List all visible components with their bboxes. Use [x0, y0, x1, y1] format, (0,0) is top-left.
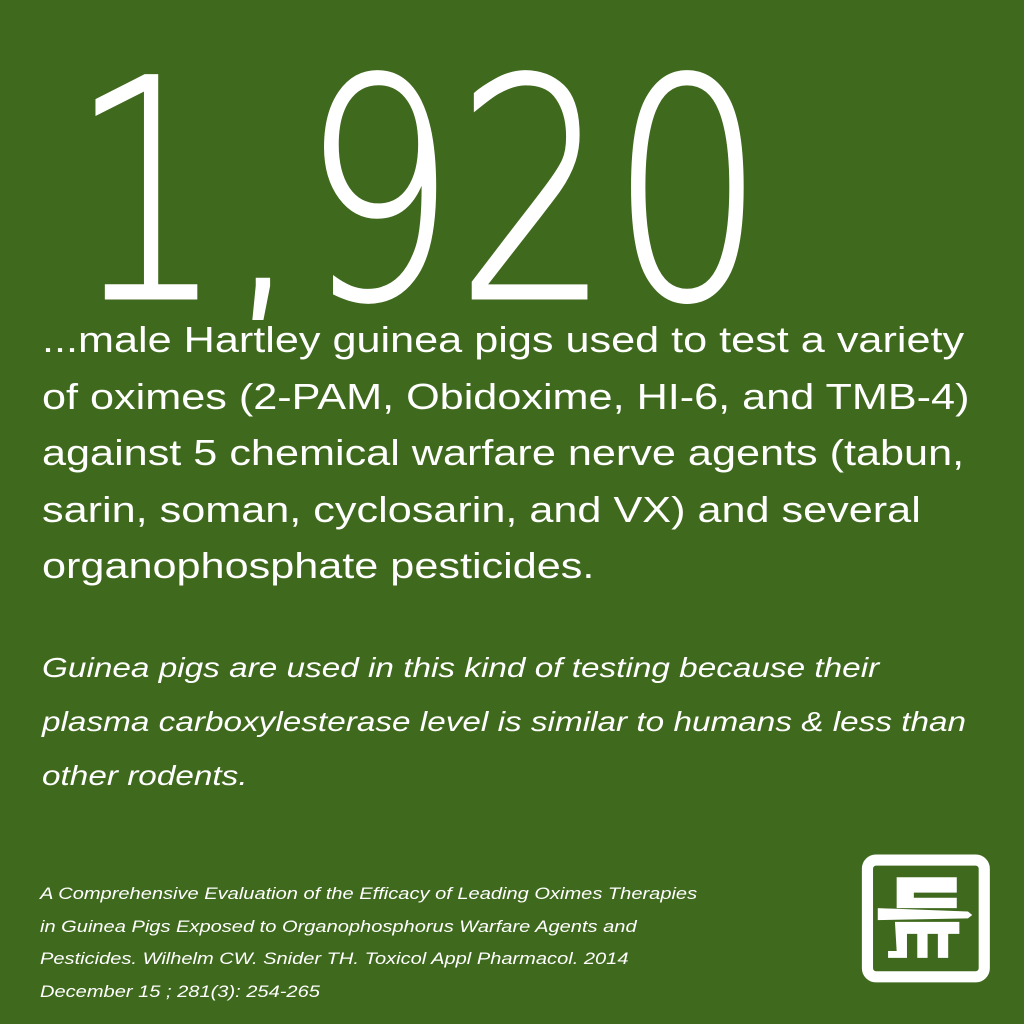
italic note: other rodents. [42, 760, 248, 791]
main text block: ...male Hartley guinea pigs used to test a variety [42, 319, 964, 360]
icon: logo [862, 854, 990, 982]
main text block: against 5 chemical warfare nerve agents (tabun, [42, 432, 964, 473]
citation: A Comprehensive Evaluation of the Efficacy of Leading Oximes Therapies [40, 884, 697, 903]
main text block: organophosphate pesticides. [42, 545, 594, 586]
citation: December 15 ; 281(3): 254-265 [40, 982, 320, 1000]
italic note [41, 652, 966, 791]
citation: in Guinea Pigs Exposed to Organophosphorus Warfare Agents and [40, 916, 637, 936]
citation [39, 884, 697, 1000]
citation: Pesticides. Wilhelm CW. Snider TH. Toxicol Appl Pharmacol. 2014 [40, 949, 628, 968]
italic note: plasma carboxylesterase level is similar to humans & less than [42, 706, 966, 737]
italic note: Guinea pigs are used in this kind of testing because their [42, 652, 879, 683]
main text block: of oximes (2-PAM, Obidoxime, HI-6, and TMB-4) [42, 376, 969, 416]
main text block: sarin, soman, cyclosarin, and VX) and several [42, 488, 921, 530]
main text block [42, 319, 969, 586]
